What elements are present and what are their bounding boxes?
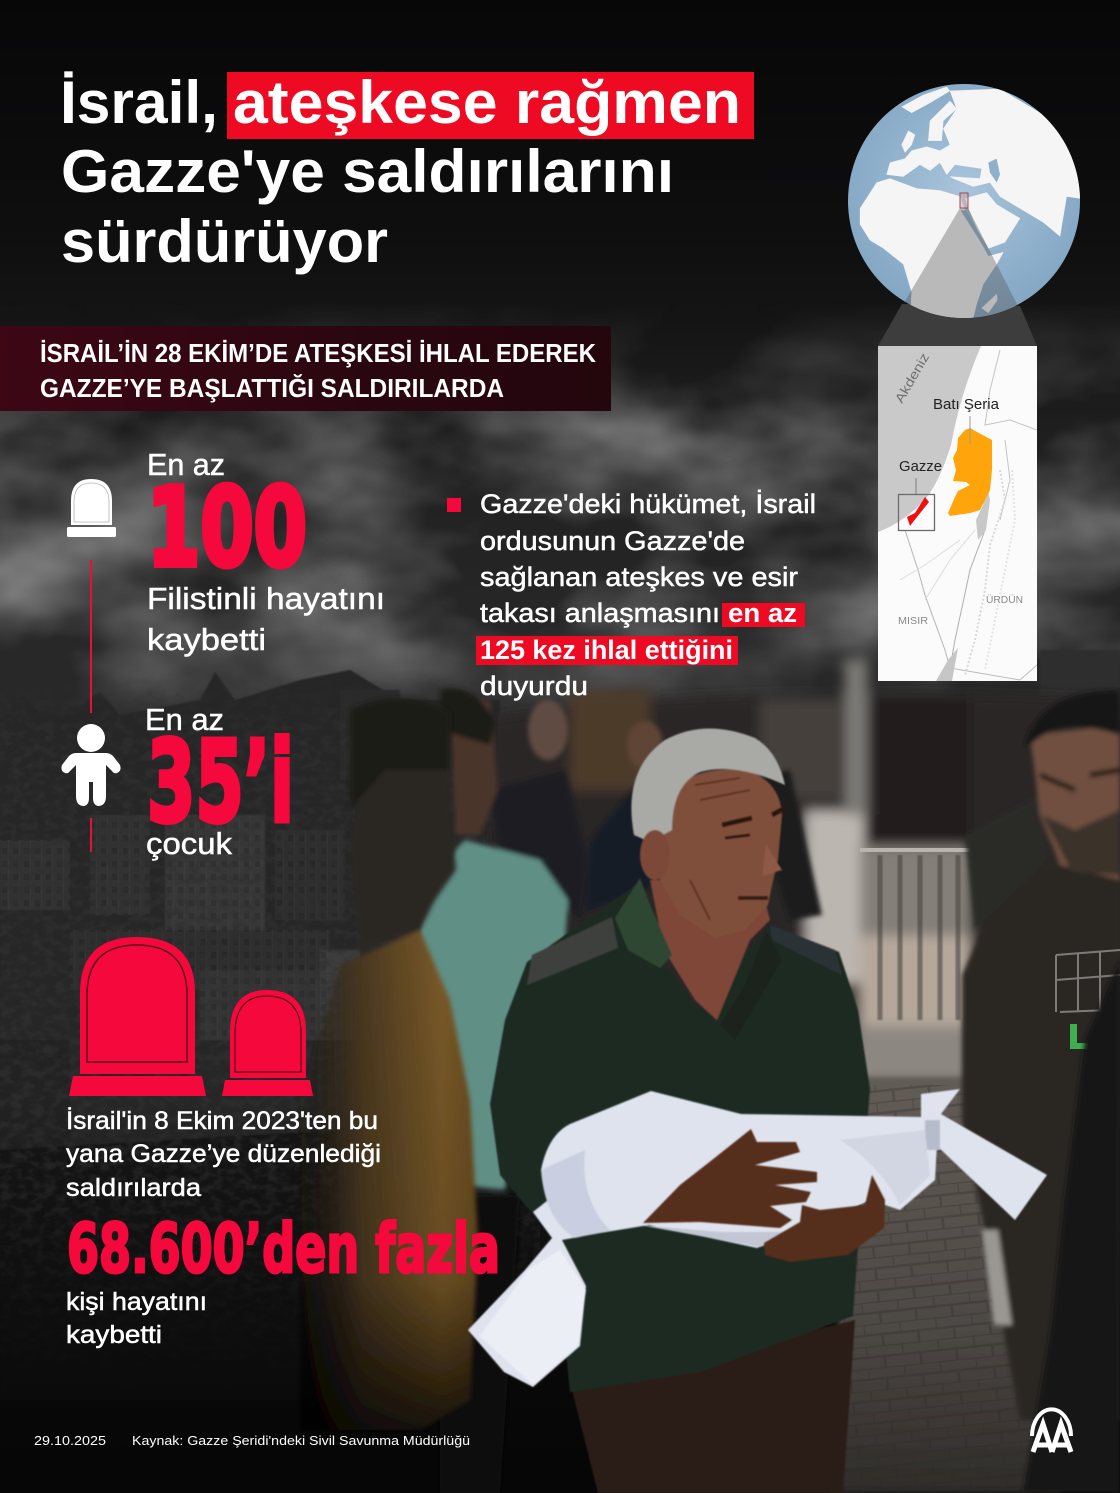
Madagascar [982,294,997,313]
title: İsrail, [60,69,218,136]
city silhouette [0,650,1120,1400]
title: sürdürüyor [61,208,388,275]
ear [640,830,670,880]
facial detail [722,808,785,825]
face [660,769,782,938]
title [60,69,754,275]
bulleted text: ceasefire violations: ordusunun Gazze'de [480,526,745,556]
wedge over globe [904,208,1018,318]
bottom darkening [0,1100,1120,1493]
map labels: Akdeniz [892,350,932,406]
trapezoid connecting globe to map [878,304,1037,346]
hands [643,1129,885,1262]
Gaza [907,497,929,526]
title: Gazze'ye saldırılarını [61,138,674,205]
stat: at least 100 Palestinians killed [147,447,385,657]
map of Gaza and West Bank: ÜRDÜN [986,594,1023,606]
banner heading: İSRAİL’İN 28 EKİM’DE ATEŞKESİ İHLAL EDEREK [40,340,597,368]
map of Gaza and West Bank: Gazze [899,458,942,475]
dark legs [440,1195,520,1493]
Africa [860,179,1003,324]
hair [631,728,785,842]
smoke clouds [0,300,1120,730]
UK [902,131,915,153]
bullet [447,498,461,512]
stat: more than 68,600 killed since 8 October 2023 [66,1106,500,1349]
highlight: en az [722,603,805,627]
Arabia [965,193,1020,249]
city windows [0,815,345,1040]
map of Gaza and West Bank [878,346,1037,681]
globe [848,84,1080,318]
sweater [490,882,870,1392]
highlight: 125 kez ihlal ettiğini [476,636,738,665]
stat: at least 100 Palestinians killed: kaybetti [147,622,266,657]
white shroud [468,1089,1047,1387]
banner heading: GAZZE’YE BAŞLATTIĞI SALDIRILARDA [40,374,504,403]
stat: at least 35 children: En az [145,702,224,737]
stat: at least 100 Palestinians killed: En az [147,447,225,482]
stat: more than 68,600 killed since 8 October 2023: kişi hayatını [66,1288,207,1316]
title highlight [227,72,754,139]
bulleted text: ceasefire violations: 125 kez ihlal ettiğini [480,635,733,665]
bulleted text: ceasefire violations: Gazze'deki hükümet, İsrail [480,488,816,519]
teal shirt man [415,840,568,1190]
city grain [0,816,540,1256]
ochre jacket person [300,698,478,1430]
West Bank [948,428,992,516]
Mediterranean [878,346,981,532]
stat: more than 68,600 killed since 8 October 2023: yana Gazze’ye düzenlediği [66,1140,381,1168]
Caspian [988,159,1000,183]
icon: white child [61,724,121,806]
red locator box [960,193,968,208]
stat: at least 35 children: çocuk [146,826,233,861]
Greenland/Arctic [902,87,950,113]
stat: at least 100 Palestinians killed: Filistinli hayatını [147,581,385,616]
Red Sea [961,210,988,252]
locator: globe and zoom wedge [840,80,1090,346]
Eurasia [887,89,1080,236]
bulleted text: ceasefire violations: sağlanan ateşkes ve esir [480,562,798,592]
bulleted text: ceasefire violations: en az [728,598,797,628]
icon: two red gravestones [69,937,313,1096]
trousers [572,1320,855,1493]
Scandinavia [928,101,957,141]
collar [615,878,672,968]
stat: more than 68,600 killed since 8 October 2023: İsrail'in 8 Ekim 2023'ten bu [66,1106,378,1135]
bulleted text: ceasefire violations: duyurdu [480,671,588,701]
stat: at least 100 Palestinians killed: 100 [147,466,307,591]
stat: at least 35 children: 35’i [147,718,294,848]
stat: more than 68,600 killed since 8 October 2023: kaybetti [66,1321,162,1349]
connector line between stat icons [90,560,92,852]
icon: AA logo [1032,1409,1071,1452]
map of Gaza and West Bank: Batı Şeria [933,396,1000,413]
footer: date and source: Kaynak: Gazze Şeridi'ndeki Sivil Savunma Müdürlüğü [132,1433,470,1448]
right man [962,690,1120,1420]
t-shirt logo [1056,950,1120,1012]
icon: white gravestone [67,479,116,537]
fence bars [880,855,958,1020]
rear photo band [490,660,1120,1100]
Gaza box [898,494,934,530]
neck and chest [650,880,770,1020]
background people [415,688,822,1493]
title: ateşkese rağmen [233,69,741,136]
stat: at least 35 children [145,702,294,861]
footer: date and source: 29.10.2025 [34,1433,106,1448]
terrain texture [900,350,1037,680]
stat: more than 68,600 killed since 8 October 2023: saldırılarda [66,1174,201,1202]
bulleted text: ceasefire violations [447,488,816,701]
cobblestone ground [830,1078,1060,1493]
banner heading [0,326,611,411]
bulleted text: ceasefire violations: takası anlaşmasını [480,598,720,628]
map of Gaza and West Bank: MISIR [898,615,928,627]
old man [490,728,870,1493]
stat: more than 68,600 killed since 8 October 2023: 68.600’den fazla [67,1210,500,1289]
foreground dark figure [1023,960,1120,1493]
